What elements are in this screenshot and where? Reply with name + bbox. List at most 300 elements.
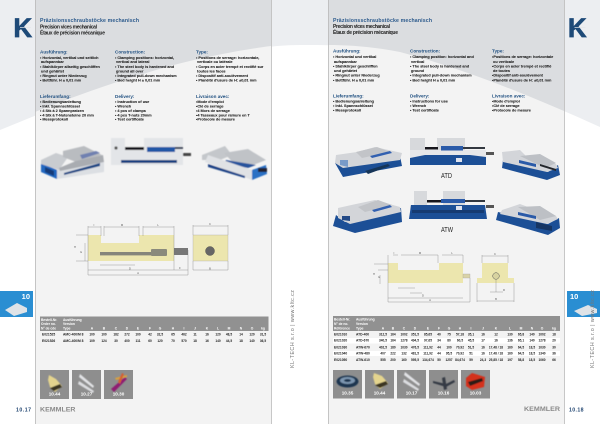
table: right page specifications: 402,5 — [379, 346, 387, 350]
photo: ATW vise front view — [409, 191, 494, 219]
table: right page specifications: 18,5 — [529, 352, 535, 356]
table: right page specifications: O — [541, 326, 544, 330]
text block: Construction left: • The steel body is hardened and — [115, 65, 175, 69]
table: right page specifications: 51,5 — [468, 346, 474, 350]
tab: section 10 left: 10 — [22, 292, 30, 301]
table: right page specifications: E021030 — [334, 346, 347, 350]
table: right page specifications: 70,92 — [456, 346, 464, 350]
thumbnail: left accessory 10.30 — [104, 370, 133, 399]
table: left page specifications: A — [91, 326, 94, 330]
text block: Lieferumfang right: • Inkl. Spannschlüssel — [333, 104, 373, 108]
table: left page specifications: B — [103, 326, 106, 330]
thumbnail: right accessory 10.35 — [333, 370, 362, 398]
text block: Delivery left: • 4 pcs of clamps — [115, 109, 146, 113]
table: right page specifications: 1278 — [400, 338, 408, 342]
text block: Livraison right: •Clé de serrage — [492, 104, 520, 108]
text block: Ausführung right: • Bettführ. H ± 0,01 mm — [333, 78, 375, 82]
table: right page specifications: 20 — [552, 338, 556, 342]
text block: Ausführung right: • Stahlkörper geschliffen — [333, 64, 378, 68]
panel: left page — [35, 0, 272, 424]
thumbnail: right accessory 10.16 — [429, 370, 458, 398]
text block: Livraison left: •Protocole de mesure — [196, 118, 235, 122]
page number: right: 10.18 — [569, 408, 584, 414]
table: right page specifications: Ausführung — [356, 318, 375, 322]
text block: Livraison left — [196, 94, 250, 122]
table: right page specifications: 12 — [494, 332, 498, 336]
table: right page specifications: 24,3 — [480, 358, 486, 362]
table: right page specifications: ATW-610 — [356, 358, 370, 362]
table: right page specifications: 140 — [529, 332, 535, 336]
table: left page specifications: kg — [261, 326, 265, 330]
table: right page specifications: 1060 — [538, 358, 546, 362]
table: right page specifications: 200 — [390, 358, 396, 362]
thumbnail: right accessory 10.44: 10.44 — [374, 390, 386, 396]
table: right page specifications: 44 — [437, 346, 441, 350]
text block: Type left: • Corps en acier trempé et rectifié sur — [196, 65, 264, 69]
thumbnail: right accessory 10.16: 10.16 — [438, 390, 450, 396]
text block: Construction left: ground all over — [115, 70, 144, 74]
heading: right page title: Präzisionsschraubstöcke mechanisch — [333, 18, 432, 24]
text block: Construction left: • Bed height H ± 0,01 mm — [115, 78, 161, 82]
technical drawing: left page: F — [179, 267, 181, 270]
table: right page specifications: H — [459, 326, 462, 330]
text block: Lieferumfang left — [40, 94, 94, 122]
table: right page specifications: 407 — [380, 352, 386, 356]
thumbnail: left accessory 10.30: 10.30 — [113, 392, 125, 396]
table: right page specifications: M — [520, 326, 523, 330]
table: right page specifications: 197 — [507, 358, 513, 362]
thumbnail: right accessory 10.03 — [461, 370, 490, 398]
table: right page specifications: 17,48 / 18 — [489, 346, 503, 350]
table: left page specifications: 60 — [148, 339, 152, 343]
text block: Livraison left: •4 Mors de serrage — [196, 109, 230, 113]
table: left page specifications: J — [194, 326, 196, 330]
table: left page specifications: 42 — [148, 332, 152, 336]
text block: Delivery right: • Wrench — [410, 104, 427, 108]
table: right page specifications: B — [392, 326, 395, 330]
text block: Construction left — [115, 50, 177, 82]
heading: right page title: Precision vices mechanical — [333, 24, 391, 30]
heading: left page title: Precision vices mechanical — [40, 24, 98, 30]
table: right page specifications: 70,92 — [456, 352, 464, 356]
text block: Ausführung right — [333, 48, 380, 82]
table: right page specifications: 1257 — [445, 358, 453, 362]
table: right page specifications: 75 — [447, 332, 451, 336]
table: left page specifications: K — [206, 326, 209, 330]
table: right page specifications: 18,5 — [529, 358, 535, 362]
text block: Construction right: • Integrated pull-down mechanism — [410, 74, 472, 78]
text block: Lieferumfang right: Lieferumfang: — [333, 94, 364, 98]
text block: Livraison right: •Mode d'emploi — [492, 99, 520, 103]
text block: Lieferumfang left: • Messprotokoll — [40, 118, 68, 122]
table: right page specifications: ATW-670 — [356, 346, 370, 350]
text block: Type right: •Corps en acier trempé et rectifié — [492, 64, 551, 68]
table: right page specifications: 45,5 — [468, 338, 474, 342]
label: ATW: ATW — [441, 227, 453, 234]
table: left page specifications: Order no. — [41, 322, 56, 326]
text block: Delivery left: • Instruction of use — [115, 100, 149, 104]
text block: Ausführung right: • Horizontal und vertikal — [333, 55, 376, 59]
table: left page specifications: O — [251, 326, 254, 330]
table: right page specifications: 140 — [529, 338, 535, 342]
photo: ATD vise front view — [410, 138, 494, 165]
text block: Construction right: ground — [410, 69, 425, 73]
text block: Type right: ou verticale — [492, 60, 514, 64]
table: right page specifications: Type — [356, 326, 364, 330]
table: right page specifications: 312,5 — [379, 332, 387, 336]
text block: Construction right: • The steel body is hardened and — [410, 64, 470, 68]
table: right page specifications: 130 — [507, 332, 513, 336]
text block: Delivery left — [115, 94, 152, 122]
table: right page specifications: 340,5 — [379, 338, 387, 342]
text block: Livraison right — [492, 94, 531, 113]
table: right page specifications: kg — [552, 326, 556, 330]
technical drawing: right page: R — [503, 289, 505, 292]
panel: right page — [328, 0, 565, 424]
table: right page specifications: 60,5 — [457, 338, 463, 342]
text block: Delivery right: Delivery: — [410, 94, 430, 98]
table: left page specifications — [40, 316, 268, 343]
table: right page specifications: 494,5 — [411, 338, 419, 342]
text block: Type left: Type: — [196, 50, 208, 54]
table: right page specifications: E — [427, 326, 430, 330]
technical drawing: left page: H — [74, 246, 76, 249]
thumbnail: left accessory 10.27: 10.27 — [81, 392, 93, 396]
table: left page specifications: 18 — [239, 339, 243, 343]
technical drawing: left page: G — [80, 251, 82, 254]
table: left page specifications: 100 — [101, 332, 107, 336]
text block: Lieferumfang left: • Bedienungsanleitung — [40, 100, 82, 104]
table: left page specifications: Bestell-Nr. — [41, 318, 57, 322]
table: right page specifications: E021020 — [334, 338, 347, 342]
text block: Ausführung left: • Stahlkörper allseitig geschliffen — [40, 65, 100, 69]
table: right page specifications: 65,1 — [518, 338, 524, 342]
icon: K logo right: K — [568, 13, 587, 43]
table: left page specifications: 36,5 — [260, 339, 266, 343]
thumbnail: left accessory 10.27 — [72, 370, 101, 399]
table: right page specifications: 160 — [401, 358, 407, 362]
technical drawing: left page — [74, 223, 228, 275]
text block: Delivery right: • Instructions for use — [410, 99, 448, 103]
table: right page specifications: 40 — [437, 332, 441, 336]
photo: ATD vise rear angled view — [502, 150, 560, 180]
table: right page specifications: 134,674 — [422, 358, 434, 362]
text block: Ausführung left: • Ringnut unter Niederzug — [40, 74, 87, 78]
text block: Construction right — [410, 48, 474, 82]
heading: left page title — [40, 18, 139, 36]
table: right page specifications: 80 — [447, 338, 451, 342]
text block: Construction left: • Clamping positions: horizontal, — [115, 56, 174, 60]
table: left page specifications: 100 — [89, 332, 95, 336]
table: right page specifications: 595,5 — [411, 358, 419, 362]
table: left page specifications: Version — [63, 322, 75, 326]
text block: Construction left: • Integrated pull-down mechanism — [115, 74, 177, 78]
text block: Construction left: Construction: — [115, 50, 146, 54]
table: right page specifications: L — [509, 326, 511, 330]
tab: section 10 right — [567, 291, 600, 317]
table: right page specifications: E021010 — [334, 332, 347, 336]
table: left page specifications: 120 — [249, 332, 255, 336]
table: right page specifications: 65,8 — [518, 332, 524, 336]
table: right page specifications: C — [403, 326, 406, 330]
text block: Livraison left: •Clé de serrage — [196, 105, 224, 109]
technical drawing: left page: L — [157, 224, 159, 227]
table: left page specifications: Ausführung — [63, 318, 82, 322]
table: left page specifications: 120 — [157, 339, 163, 343]
technical drawing: right page: D — [422, 294, 424, 298]
table: left page specifications: 18 — [193, 339, 197, 343]
table: right page specifications: 84,674 — [455, 358, 465, 362]
table: right page specifications: 16 — [481, 346, 485, 350]
table: left page specifications: 30 — [114, 339, 118, 343]
label: ATD: ATD — [441, 173, 452, 180]
table: right page specifications: 100 — [446, 346, 452, 350]
text block: Livraison left: Livraison avec: — [196, 94, 230, 99]
technical drawing: left page: C — [209, 223, 211, 226]
table: left page specifications: 272 — [124, 332, 130, 336]
table: left page specifications: 124 — [101, 339, 107, 343]
text block: Type right: •Positions de serrage: horizontale — [492, 55, 553, 59]
thumbnail: left accessory 10.44 — [40, 370, 69, 399]
text block: Delivery left: Delivery: — [115, 94, 135, 99]
thumbnail: right accessory 10.17 — [397, 370, 426, 398]
brand: KEMMLER right: KEMMLER — [524, 407, 561, 413]
table: left page specifications: 100 — [135, 332, 141, 336]
table: right page specifications: Bestell-Nr. — [334, 318, 350, 322]
table: right page specifications: F — [438, 326, 440, 330]
table: left page specifications: C — [115, 326, 118, 330]
table: right page specifications: ATW-480 — [356, 352, 370, 356]
table: right page specifications — [333, 316, 560, 362]
text block: Ausführung left: • Horizontal, vertikal und seitlich — [40, 56, 99, 60]
table: right page specifications: 351,5 — [411, 332, 419, 336]
text block: Type right: •Planéité d'usure de H: ±0,01 mm — [492, 78, 552, 82]
table: right page specifications: 111,92 — [423, 346, 433, 350]
table: left page specifications: M — [228, 326, 231, 330]
text block: Livraison right: •Protocole de mesure — [492, 109, 531, 113]
technical drawing: right page: H — [373, 273, 375, 276]
table: right page specifications: 160 — [507, 352, 513, 356]
table: left page specifications: 570 — [181, 339, 187, 343]
text block: Type left — [196, 50, 264, 82]
table: right page specifications: 16 — [481, 352, 485, 356]
table: left page specifications: 111 — [136, 339, 141, 343]
text block: Type right — [492, 48, 553, 82]
table: right page specifications: 164 — [390, 332, 396, 336]
technical drawing: left page: M — [121, 224, 123, 227]
text block: Delivery left: • Test certificate — [115, 118, 144, 122]
table: right page specifications: 17 — [481, 338, 485, 342]
text block: Ausführung right: Ausführung: — [333, 48, 361, 54]
table: left page specifications: N° de cde — [41, 326, 56, 330]
table: right page specifications: J — [482, 326, 484, 330]
table: right page specifications: 18 — [552, 332, 556, 336]
table: right page specifications: ATD-400 — [356, 332, 369, 336]
text block: Livraison left: •Mode d'emploi — [196, 100, 224, 104]
photo: ATD vise angled view — [335, 147, 402, 177]
text block: Construction right: Construction: — [410, 48, 441, 54]
thumbnail: right accessory 10.35: 10.35 — [342, 390, 354, 396]
technical drawing: left page: D — [129, 268, 131, 270]
tab: section 10 right: 10 — [570, 292, 578, 301]
thumbnail: right accessory 10.44 — [365, 370, 394, 398]
table: left page specifications: E — [137, 326, 140, 330]
table: left page specifications: E021526 — [42, 339, 55, 343]
table: left page specifications: Type — [63, 326, 71, 330]
table: right page specifications: 180 — [390, 346, 396, 350]
table: right page specifications: 36 — [552, 352, 556, 356]
table: left page specifications: 11 — [193, 332, 197, 336]
table: right page specifications: 17,48 / 18 — [489, 352, 503, 356]
table: right page specifications: 57,18 — [456, 332, 464, 336]
heading: left page title: Étaux de précision mécanique — [40, 28, 105, 36]
technical drawing: right page — [373, 252, 514, 302]
table: right page specifications: D — [414, 326, 417, 330]
table: right page specifications: Référence — [334, 326, 350, 330]
text block: Livraison left: •4 Tasseaux pour rainure en T — [196, 114, 250, 118]
photo: ATW vise rear angled view — [496, 204, 560, 235]
thumbnail: right accessory 10.17: 10.17 — [406, 390, 418, 396]
table: right page specifications: 85,65 — [424, 332, 432, 336]
table: left page specifications: 32,5 — [157, 332, 163, 336]
table: right page specifications: 555 — [380, 358, 386, 362]
icon: K logo left: K — [14, 13, 32, 43]
heading: right page title: Étaux de précision mécanique — [333, 28, 398, 36]
table: right page specifications: 1340 — [538, 352, 546, 356]
table: left page specifications: D — [126, 326, 129, 330]
technical drawing: left page: B — [209, 268, 211, 270]
tab: section 10 left — [0, 291, 33, 317]
technical drawing: right page: I — [394, 252, 395, 255]
text block: Lieferumfang right — [333, 94, 375, 113]
table: left page specifications: 109 — [89, 339, 95, 343]
table: right page specifications: 95,5 — [446, 352, 452, 356]
heading: right page title — [333, 18, 432, 36]
table: right page specifications: 44 — [437, 352, 441, 356]
table: right page specifications: 25,85 / 18 — [489, 358, 503, 362]
table: left page specifications: 70 — [171, 339, 175, 343]
table: right page specifications: 30 — [552, 346, 556, 350]
table: left page specifications: 182 — [113, 332, 119, 336]
table: left page specifications: E021525 — [42, 332, 55, 336]
text block: Type right: de toutes — [492, 69, 510, 73]
table: right page specifications: 481,5 — [411, 352, 419, 356]
table: right page specifications: 66 — [552, 358, 556, 362]
photo: left vise front view — [111, 138, 191, 165]
text block: Construction left: vertical and lateral — [115, 60, 149, 64]
text block: Ausführung left: aufspannbar — [40, 60, 64, 64]
table: left page specifications: 44,5 — [226, 339, 232, 343]
table: right page specifications: 64,5 — [518, 346, 524, 350]
table: left page specifications: 16 — [205, 332, 209, 336]
photo: left vise rear angled view — [202, 146, 267, 180]
text block: Ausführung left: und gehärtet — [40, 70, 65, 74]
text block: Construction right: vertical — [410, 60, 424, 64]
text block: Type left: • Dispositif anti-soulèvement — [196, 74, 249, 78]
table: right page specifications: 222 — [390, 352, 396, 356]
text block: Lieferumfang right: • Bedienungsanleitung — [333, 99, 375, 103]
text block: Ausführung left: • Bettführ. H ± 0,01 mm — [40, 78, 82, 82]
table: left page specifications: N — [240, 326, 243, 330]
table: left page specifications: 140 — [215, 339, 221, 343]
table: right page specifications: 35,1 — [468, 332, 474, 336]
vertical text: right margin url: KL-TECH s.r.o | www.kltc.cz — [590, 290, 596, 368]
table: left page specifications: 65 — [171, 332, 175, 336]
table: right page specifications: 18,5 — [529, 346, 535, 350]
technical drawing: right page: L — [451, 252, 453, 255]
table: right page specifications: E021040 — [334, 352, 347, 356]
heading: left page title: Präzisionsschraubstöcke mechanisch — [40, 18, 139, 24]
table: right page specifications: 97,65 — [424, 338, 432, 342]
table: left page specifications: 120 — [215, 332, 221, 336]
table: right page specifications: 160 — [507, 346, 513, 350]
table: right page specifications: 16 — [481, 332, 485, 336]
technical drawing: right page: C — [494, 253, 496, 256]
table: left page specifications: 14 — [239, 332, 243, 336]
table: left page specifications: 400 — [124, 339, 130, 343]
table: right page specifications: 1002 — [400, 332, 408, 336]
table: left page specifications: 16 — [205, 339, 209, 343]
table: right page specifications: 64,5 — [518, 352, 524, 356]
table: right page specifications: 136 — [507, 338, 513, 342]
technical drawing: right page: A — [429, 299, 431, 302]
text block: Type left: • Positions de serrage: horizontale, — [196, 56, 259, 60]
text block: Type right: •Dispositif anti-soulèvement — [492, 74, 544, 78]
text block: Type left: verticale ou latérale — [196, 60, 233, 64]
table: right page specifications: 164 — [390, 338, 396, 342]
text block: Lieferumfang right: • Messprotokoll — [333, 109, 361, 113]
technical drawing: right page: B — [495, 298, 497, 301]
table: right page specifications: E021050 — [334, 358, 347, 362]
technical drawing: right page: G — [378, 276, 380, 279]
table: left page specifications: L — [217, 326, 219, 330]
vertical text: left margin url: KL-TECH s.r.o | www.kltc.cz — [290, 290, 296, 368]
text block: Livraison right: Livraison avec: — [492, 94, 526, 98]
table: left page specifications: 140 — [249, 339, 255, 343]
table: left page specifications: 31,5 — [260, 332, 266, 336]
table: left page specifications: AMC-400/M 8 — [63, 332, 84, 336]
text block: Lieferumfang left: • 4 Stk à 2 Spannpratzen — [40, 109, 85, 113]
table: left page specifications: G — [159, 326, 162, 330]
table: right page specifications: 50 — [437, 358, 441, 362]
technical drawing: left page: A — [137, 272, 139, 275]
brand: KEMMLER left: KEMMLER — [40, 408, 76, 414]
table: left page specifications: AMC-400/M 8 — [63, 339, 84, 343]
text block: Ausführung right: aufspannbar — [333, 60, 357, 64]
table: right page specifications: A — [382, 326, 385, 330]
text block: Type right: Type: — [492, 48, 504, 54]
table: left page specifications: 462 — [181, 332, 187, 336]
text block: Lieferumfang left: • Inkl. Spannschlüssel — [40, 105, 80, 109]
table: left page specifications: H — [172, 326, 175, 330]
table: right page specifications: G — [448, 326, 451, 330]
thumbnail: left accessory 10.44: 10.44 — [49, 392, 61, 396]
text block: Delivery left: • Wrench — [115, 105, 132, 109]
table: right page specifications: N — [531, 326, 534, 330]
page number: left: 10.17 — [16, 408, 31, 414]
table: right page specifications: 34 — [437, 338, 441, 342]
text block: Construction right: • Bed height H ± 0,01 mm — [410, 78, 456, 82]
table: right page specifications: 59 — [469, 358, 473, 362]
photo: left vise angled view — [41, 146, 104, 179]
table: right page specifications: 132 — [401, 352, 407, 356]
table: left page specifications: I — [184, 326, 185, 330]
technical drawing: right page: M — [419, 252, 421, 255]
text block: Lieferumfang left: • 4 Stk à T-Nutensteine 20 mm — [40, 114, 94, 118]
photo: ATW vise angled view — [333, 200, 402, 233]
table: right page specifications: K — [495, 326, 498, 330]
text block: Lieferumfang left: Lieferumfang: — [40, 94, 71, 99]
